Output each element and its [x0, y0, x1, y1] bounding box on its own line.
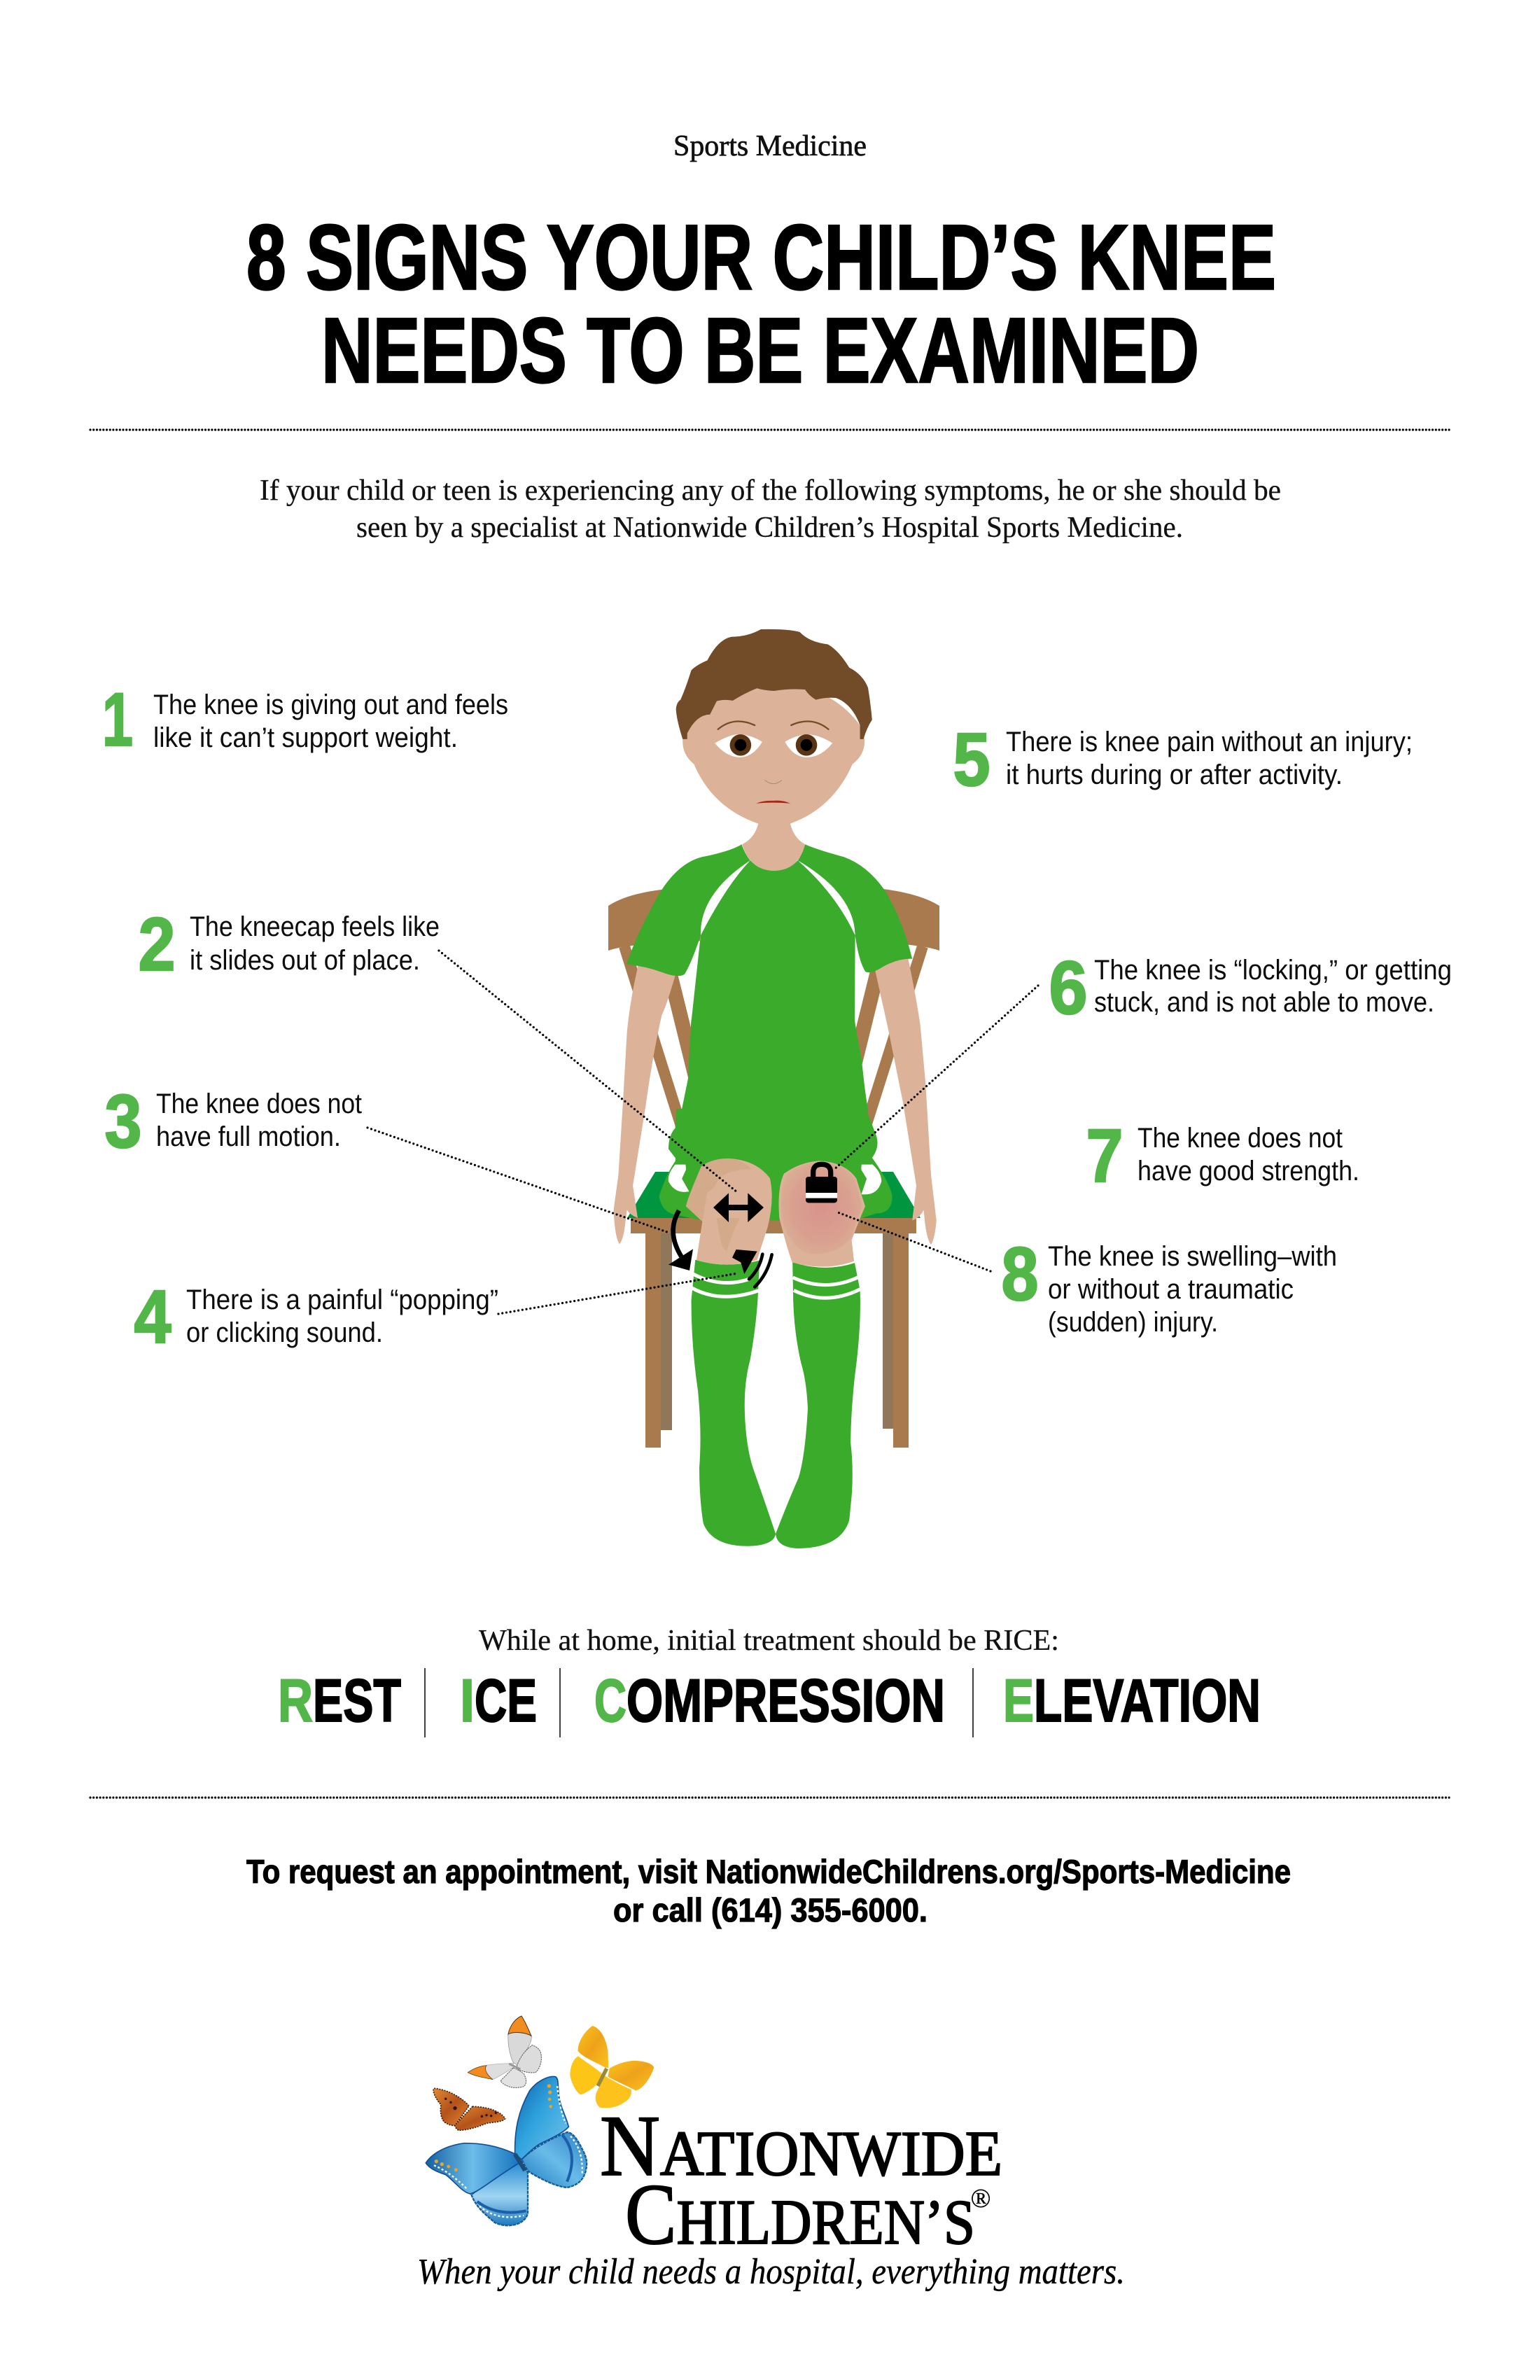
ice — [460, 1667, 537, 1735]
sign 2 — [139, 902, 440, 986]
butterfly: gray — [468, 2016, 541, 2087]
right swollen knee — [778, 1161, 865, 1267]
butterfly: yellow — [570, 2026, 654, 2108]
number 7: 7 — [1086, 1113, 1123, 1198]
sign 2 text: The kneecap feels like — [190, 911, 440, 942]
sign 3 text: have full motion. — [156, 1121, 341, 1152]
intro text: seen by a specialist at Nationwide Children’s Hospital Sports Medicine. — [356, 512, 1183, 544]
boy figure — [604, 629, 937, 1548]
section label: Sports Medicine — [673, 130, 867, 162]
logo — [417, 2016, 1125, 2292]
right sock — [776, 1262, 860, 1548]
knee symptom icons — [668, 1164, 837, 1287]
sign 5 — [953, 717, 1413, 802]
title: NEEDS TO BE EXAMINED — [321, 299, 1199, 402]
call to action: or call (614) 355-6000. — [613, 1891, 927, 1928]
number 5: 5 — [953, 717, 990, 802]
face — [682, 687, 864, 824]
mouth — [756, 801, 790, 804]
leader line: sign 3 — [368, 1128, 667, 1232]
arms — [614, 952, 937, 1245]
tagline: When your child needs a hospital, everything matters. — [417, 2252, 1125, 2292]
butterfly: orange — [433, 2088, 505, 2130]
sign 8 text: or without a traumatic — [1048, 1274, 1294, 1305]
chair — [608, 889, 939, 1448]
sign 7 — [1086, 1113, 1359, 1198]
sign 3 text: The knee does not — [156, 1088, 362, 1119]
sign 3 — [105, 1079, 362, 1163]
sign 1 — [102, 677, 508, 762]
right sleeve — [798, 844, 912, 972]
sign 6 — [1049, 945, 1452, 1030]
sign 8 text — [1048, 1241, 1337, 1338]
rest: EST — [313, 1667, 401, 1735]
sign 4 text: There is a painful “popping” — [186, 1284, 498, 1315]
sign 5 text: There is knee pain without an injury; — [1006, 727, 1413, 757]
number 2: 2 — [139, 902, 175, 986]
eyebrows — [718, 722, 828, 729]
wordmark: CHILDREN’S — [625, 2166, 975, 2262]
wordmark: NATIONWIDE — [600, 2098, 1002, 2194]
wordmark: ® — [971, 2184, 990, 2213]
sign 5 text: it hurts during or after activity. — [1006, 760, 1343, 790]
wordmark — [600, 2098, 1002, 2262]
treatment intro: While at home, initial treatment should be RICE: — [479, 1625, 1059, 1657]
sign 3 text — [156, 1088, 362, 1152]
sign 7 text — [1138, 1123, 1359, 1186]
rest — [278, 1667, 401, 1735]
leader line: sign 6 — [833, 986, 1038, 1170]
white gaps behind shirt — [694, 860, 862, 977]
title: 8 SIGNS YOUR CHILD’S KNEE — [246, 206, 1276, 309]
sign 6 text: stuck, and is not able to move. — [1094, 987, 1434, 1018]
compression: OMPRESSION — [626, 1667, 945, 1735]
leader lines — [368, 951, 1038, 1314]
sign 4 text: or clicking sound. — [186, 1317, 383, 1348]
call to action: To request an appointment, visit NationwideChildrens.org/Sports-Medicine — [246, 1853, 1291, 1890]
knees — [686, 1158, 865, 1267]
nose — [765, 780, 782, 784]
number 6: 6 — [1049, 945, 1088, 1030]
chair back rail — [608, 889, 939, 951]
ice: CE — [475, 1667, 537, 1735]
sign 4 text — [186, 1284, 498, 1348]
sock stripes — [692, 1274, 860, 1298]
butterflies — [426, 2016, 654, 2225]
leader line: sign 4 — [498, 1273, 738, 1314]
number 4: 4 — [134, 1274, 171, 1359]
leader line: sign 2 — [439, 951, 737, 1192]
sign 2 text: it slides out of place. — [190, 945, 420, 976]
sign 6 text: The knee is “locking,” or getting — [1094, 955, 1452, 986]
sign 1 text — [153, 690, 508, 753]
torso and shirt — [604, 844, 912, 1165]
chair seat and legs — [631, 1218, 916, 1448]
left sleeve — [626, 844, 750, 976]
icon: curved motion arrow — [668, 1210, 693, 1270]
number 3: 3 — [105, 1079, 141, 1163]
eyes — [715, 734, 832, 757]
butterfly: blue — [426, 2076, 587, 2225]
hair — [676, 629, 872, 739]
leader line: sign 8 — [838, 1212, 990, 1271]
sign 2 text — [190, 911, 440, 976]
icon: popping sound — [732, 1250, 772, 1287]
number 1: 1 — [102, 677, 133, 762]
elevation: LEVATION — [1034, 1667, 1261, 1735]
ice: I — [460, 1667, 475, 1735]
elevation — [1003, 1667, 1261, 1735]
RICE list — [278, 1667, 1261, 1735]
number 8: 8 — [1001, 1231, 1039, 1316]
left sock — [692, 1260, 776, 1546]
sign 8 text: (sudden) injury. — [1048, 1307, 1218, 1338]
sign 4 — [134, 1274, 498, 1359]
sign 7 text: The knee does not — [1138, 1123, 1343, 1154]
call to action — [246, 1853, 1291, 1928]
sign 1 text: like it can’t support weight. — [153, 722, 458, 753]
sign 6 text — [1094, 955, 1452, 1018]
elevation: E — [1003, 1667, 1034, 1735]
intro text: If your child or teen is experiencing any of the following symptoms, he or she should be — [260, 475, 1281, 507]
sign 8 — [1001, 1231, 1337, 1338]
icon: padlock — [806, 1164, 837, 1203]
compression: C — [594, 1667, 626, 1735]
sign 5 text — [1006, 727, 1413, 790]
chair seat cushion — [627, 1172, 920, 1218]
sign 7 text: have good strength. — [1138, 1156, 1359, 1186]
rest: R — [278, 1667, 313, 1735]
title — [246, 206, 1276, 402]
icon: double arrow — [713, 1193, 764, 1222]
left knee — [686, 1158, 772, 1265]
head — [676, 629, 872, 824]
sign 8 text: The knee is swelling–with — [1048, 1241, 1337, 1272]
intro text — [260, 475, 1281, 544]
sign 1 text: The knee is giving out and feels — [153, 690, 508, 720]
chair left struts — [624, 946, 923, 1130]
neck — [742, 822, 805, 871]
shorts — [659, 1107, 892, 1220]
